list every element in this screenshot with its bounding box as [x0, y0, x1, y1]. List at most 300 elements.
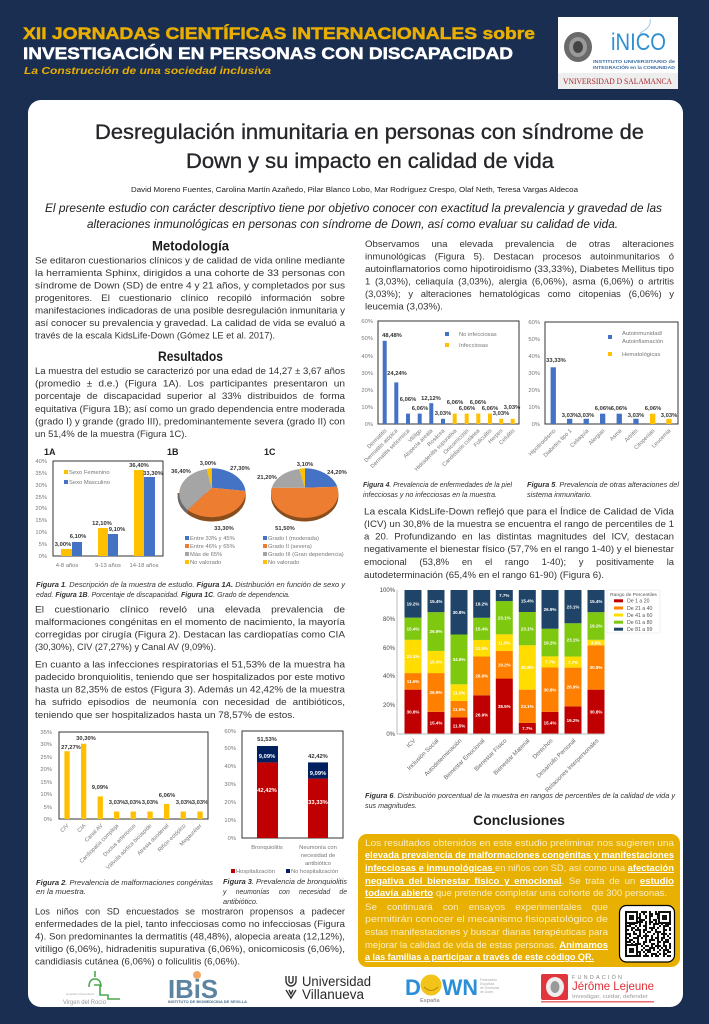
text: otras alteraciones inmunológicas: leucemia (3,03%).: [365, 302, 443, 312]
chart 1A: sexo y edad: Sexo Masculino: [69, 480, 110, 486]
chart figura 2: malformaciones: Ductus arteriosus: [102, 823, 138, 858]
chart figura 6: percentiles calidad de vida: ICV: [406, 738, 417, 749]
logo: IBiS: [168, 971, 248, 1004]
chart figura 3: bronquiolitis y neumonías: necesidad de: [301, 853, 335, 859]
chart figura 2: malformaciones: 35%: [40, 730, 52, 736]
text: piel: candidiasis cutánea (6,06%) o foliculitis (6,06%).: [35, 956, 240, 966]
chart figura 6: percentiles calidad de vida: 7.7%: [499, 593, 509, 598]
chart figura 4: piel: Dermatitis: [366, 428, 389, 450]
logo: DOWN España: WN: [442, 975, 478, 1000]
chart 1A: sexo y edad: 14-18 años: [129, 563, 159, 569]
chart figura 6: percentiles calidad de vida: Desarrollo Personal: [536, 738, 577, 780]
text: metodología: través de la escala KidsLife-Down (Gómez LE et al. 2017).: [35, 330, 275, 340]
chart figura 6: percentiles calidad de vida: Bienestar Físico: [474, 738, 509, 773]
chart 1A: sexo y edad: Sexo Femenino: [69, 470, 110, 476]
text: otras alteraciones inmunológicas: autoinflamatorios como hipotiroidismo (33,33%), Diabetes Mellitus tipo: [365, 264, 674, 274]
chart figura 6: percentiles calidad de vida: 11.5%: [453, 690, 465, 695]
chart figura 5: inmunitario: 0%: [532, 422, 540, 428]
legend figura 6: De 81 a 99: [627, 627, 652, 633]
text: metodología: manifestaciones indicadoras de una posible desregulación inmunitaria y: [35, 306, 345, 316]
logo: DOWN España: España: [420, 998, 441, 1004]
chart figura 6: percentiles calidad de vida: 7.7%: [545, 660, 555, 665]
caption figura 1: [36, 580, 346, 599]
legend figura 6: Rango de Percentiles: [610, 592, 657, 598]
chart figura 4: piel: Infecciosas: [459, 343, 488, 349]
chart figura 2: malformaciones: [40, 730, 208, 871]
logo: DOWN España: Española: [480, 982, 494, 986]
chart figura 2: malformaciones: 3,03%: [192, 800, 208, 806]
chart 1C: pie dependencia: Grado III (Gran dependencia): [268, 552, 344, 558]
text: metodología: [35, 256, 346, 340]
panel: conclusiones: Los resultados obtenidos en este estudio preliminar nos sugieren una: [365, 838, 675, 848]
intro objective: [45, 201, 662, 231]
icon: QR code: [620, 906, 674, 962]
caption figura 6: sus magnitudes.: [365, 801, 417, 810]
chart 1A: sexo y edad: 40%: [35, 459, 47, 465]
chart figura 3: bronquiolitis y neumonías: antibiótico: [305, 861, 331, 867]
chart figura 5: inmunitario: 50%: [528, 337, 540, 343]
chart figura 5: inmunitario: Artritis: [624, 428, 640, 444]
logo: DOWN España: [405, 974, 500, 1004]
panel: conclusiones: estas manifestaciones y buscar dianas terapéuticas para: [365, 927, 609, 937]
chart figura 2: malformaciones: CIV: [60, 823, 71, 834]
text: metodología: Se editaron cuestionarios clínicos y de calidad de vida online mediante: [35, 256, 345, 266]
chart figura 5: inmunitario: 20%: [528, 388, 540, 394]
chart figura 4: piel: Hidradenitis supurativa: [414, 428, 459, 473]
logo: Universidad Villanueva: Universidad: [302, 974, 371, 989]
text: metodología: síndrome de Down (SD) de entre 4 y 21 años, y completados por sus: [35, 280, 345, 290]
text: otras alteraciones inmunológicas: Observamos una elevada prevalencia de otras alteraciones: [365, 239, 674, 249]
text: calidad de vida: negativamente el bienestar físico (57,7% en el rango 1-40) y el bienestar: [364, 544, 674, 554]
chart figura 6: percentiles calidad de vida: 15.4%: [430, 599, 442, 604]
chart 1A: sexo y edad: 1A: [44, 447, 56, 457]
chart 1C: pie dependencia: 1C: [264, 447, 276, 457]
text: malformaciones: [35, 604, 346, 652]
chart figura 6: percentiles calidad de vida: 100%: [380, 588, 396, 594]
text: metodología: así conocer su prevalencia y gravedad. La calidad de vida se evaluó a: [35, 318, 346, 328]
chart figura 5: inmunitario: Alergias: [588, 428, 607, 447]
chart figura 6: percentiles calidad de vida: 26.9%: [544, 607, 556, 612]
intro objective: alteraciones inmunológicas en personas con síndrome de Down, así como evaluar su calidad de vida.: [87, 217, 618, 231]
text: infecciones respiratorias: padecido bronquiolitis, teniendo que ser hospitalizados por este motivo: [35, 672, 345, 682]
chart figura 4: piel: 24,24%: [387, 371, 407, 377]
chart figura 6: percentiles calidad de vida: 38.5%: [498, 704, 511, 709]
caption figura 1: edad. Figura 1B. Porcentaje de discapacidad. Figura 1C. Grado de dependencia.: [36, 590, 290, 599]
logo: DOWN España: D: [405, 975, 421, 1000]
chart figura 5: inmunitario: Leucemia: [651, 428, 673, 450]
chart figura 6: percentiles calidad de vida: 40%: [383, 674, 396, 680]
chart figura 6: percentiles calidad de vida: 34.6%: [453, 657, 465, 662]
chart figura 3: bronquiolitis y neumonías: Hospitalización: [236, 869, 275, 875]
text: infecciones respiratorias: ha sufrido episodios de neumonía con necesidad de antibióticos,: [35, 697, 345, 707]
chart 1A: sexo y edad: 33,30%: [143, 471, 163, 477]
logo: INICO Universidad de Salamanca: INTEGRACIÓN en la COMUNIDAD: [593, 65, 675, 70]
chart 1B: pie discapacidad: 33,30%: [214, 526, 234, 532]
chart figura 6: percentiles calidad de vida: 26.9%: [475, 674, 488, 679]
chart 1B: pie discapacidad: Entre 33% y 45%: [190, 536, 235, 542]
chart figura 2: malformaciones: 6,06%: [159, 793, 175, 799]
chart figura 6: percentiles calidad de vida: 20%: [383, 703, 396, 709]
caption figura 3: [222, 877, 347, 906]
chart figura 2: malformaciones: Megauréter: [179, 823, 204, 848]
chart figura 6: percentiles calidad de vida: 7.7%: [522, 726, 532, 731]
text: resultados: un 51,4% de la muestra (Figura 1C).: [35, 429, 187, 439]
chart figura 4: piel: 6,06%: [447, 400, 463, 406]
text: resultados: [35, 366, 346, 439]
panel: conclusiones: [358, 834, 680, 967]
chart figura 5: inmunitario: 3,03%: [562, 413, 578, 419]
chart figura 6: percentiles calidad de vida: 15.4%: [407, 626, 419, 632]
heading: Resultados: Resultados: [158, 349, 223, 364]
chart figura 3: bronquiolitis y neumonías: 20%: [224, 800, 236, 806]
chart 1A: sexo y edad: 25%: [35, 495, 47, 501]
chart figura 4: piel: [361, 319, 520, 473]
chart 1A: sexo y edad: 12,10%: [92, 521, 112, 527]
chart figura 5: inmunitario: 6,06%: [611, 406, 627, 412]
chart figura 5: inmunitario: Hematológicas: [622, 352, 660, 358]
logo: INICO Universidad de Salamanca: VNIVERSIDAD D SALAMANCA: [563, 77, 672, 86]
text: resultados: equitativa (Figura 1B); así como un grado dependencia entre moderada: [35, 404, 346, 414]
chart figura 6: percentiles calidad de vida: 11.5%: [453, 723, 465, 728]
text: calidad de vida: La escala KidsLife-Down reflejó que para el Índice de Calidad de Vida: [364, 506, 675, 516]
chart figura 6: percentiles calidad de vida: 26.9%: [430, 690, 442, 695]
text: malformaciones: corregidas por cirugía (Figura 2). Destacan las cardiopatías como CIA: [35, 630, 346, 640]
caption figura 2: [36, 878, 213, 896]
logo: INICO Universidad de Salamanca: [558, 17, 678, 89]
chart figura 5: inmunitario: Citopenias: [633, 428, 657, 451]
text: metodología: la herramienta Sphinx, dirigidos a una cohorte de 33 personas con: [35, 268, 345, 278]
chart figura 5: inmunitario: 10%: [528, 405, 540, 411]
chart figura 4: piel: 6,06%: [400, 397, 416, 403]
chart figura 4: piel: Onicomicosis: [443, 428, 471, 456]
text: infecciones respiratorias: teniendo que ser hospitalizados hasta un 78,57% de estos.: [35, 710, 295, 720]
chart figura 4: piel: 48,48%: [382, 333, 402, 339]
caption figura 2: Figura 2. Prevalencia de malformaciones congénitas: [36, 878, 213, 887]
chart figura 3: bronquiolitis y neumonías: 42,42%: [257, 788, 277, 794]
chart figura 6: percentiles calidad de vida: [380, 588, 660, 794]
chart 1C: pie dependencia: Grado I (moderada): [268, 536, 319, 542]
chart figura 5: inmunitario: 3,03%: [628, 413, 644, 419]
text: infecciones respiratorias: [35, 660, 346, 720]
logo: IBiS: IBiS: [168, 974, 218, 1004]
logo: Universidad Villanueva: [286, 974, 371, 1002]
chart figura 4: piel: Dermatitis atópica: [364, 428, 400, 464]
text: resultados: (grado I) y grande (grado III), predominantemente severa (grado II) con: [35, 416, 345, 426]
caption figura 4: infecciosas y no infecciosas en la muestra.: [363, 490, 497, 499]
chart figura 3: bronquiolitis y neumonías: 10%: [224, 818, 236, 824]
chart figura 6: percentiles calidad de vida: 23.1%: [521, 626, 534, 631]
chart figura 3: bronquiolitis y neumonías: 51,53%: [257, 737, 277, 743]
chart figura 6: percentiles calidad de vida: 15.4%: [475, 627, 488, 632]
chart figura 2: malformaciones: Válvula aórtica bicúspide: [105, 823, 153, 871]
chart figura 6: percentiles calidad de vida: 19.2%: [544, 640, 556, 645]
text: calidad de vida: emocional (53,8% en el rango 1-40); y positivamente la: [364, 557, 675, 567]
caption figura 1: Figura 1. Descripción de la muestra de estudio. Figura 1A. Distribución en función de sexo y: [36, 580, 346, 589]
chart figura 2: malformaciones: 5%: [44, 805, 52, 811]
chart 1A: sexo y edad: 4-8 años: [56, 563, 78, 569]
text: piel: [35, 906, 346, 966]
chart figura 4: piel: 6,06%: [412, 406, 428, 412]
chart figura 6: percentiles calidad de vida: Bienestar Emocional: [443, 738, 486, 781]
text: otras alteraciones inmunológicas: (3,03%); y alteraciones hematológicas como citopenias (6,06%) y: [365, 289, 674, 299]
chart figura 4: piel: 3,03%: [504, 405, 520, 411]
text: infecciones respiratorias: En cuanto a las infecciones respiratorias el 51,53% de la muestra ha: [35, 660, 346, 670]
chart figura 5: inmunitario: Autoinflamación: [622, 339, 663, 345]
chart figura 2: malformaciones: 0%: [44, 817, 52, 823]
chart figura 5: inmunitario: 3,03%: [661, 413, 677, 419]
chart figura 2: malformaciones: 3,03%: [125, 800, 141, 806]
chart 1A: sexo y edad: 5%: [39, 542, 47, 548]
chart figura 4: piel: Celulitis: [498, 428, 517, 446]
text: piel: 4). Son predominantes la dermatitis (48,48%), alopecia areata (12,12%),: [35, 932, 345, 942]
chart figura 2: malformaciones: 20%: [40, 767, 52, 773]
chart figura 6: percentiles calidad de vida: 23.1%: [407, 654, 419, 659]
caption figura 3: Figura 3. Prevalencia de bronquiolitis: [223, 877, 347, 886]
logo: Fundación Jérôme Lejeune: Jérôme Lejeune: [572, 979, 654, 993]
chart figura 6: percentiles calidad de vida: 80%: [383, 617, 396, 623]
caption figura 6: Figura 6. Distribución porcentual de la muestra en rangos de percentiles de la calidad de vida y: [365, 791, 676, 800]
chart 1B: pie discapacidad: Entre 46% y 65%: [190, 544, 235, 550]
text: calidad de vida: a 20. Profundizando en las distintas magnitudes del ICV, destacan: [364, 532, 674, 542]
caption figura 5: sistema inmunitario.: [527, 490, 592, 499]
logo: Universidad Villanueva: Villanueva: [302, 987, 364, 1002]
chart 1C: pie dependencia: Grado II (severa): [268, 544, 312, 550]
chart figura 6: percentiles calidad de vida: 11.5%: [498, 640, 511, 645]
chart figura 6: percentiles calidad de vida: 30.8%: [521, 665, 534, 670]
chart figura 3: bronquiolitis y neumonías: No hospitalización: [291, 869, 338, 875]
panel: conclusiones: mejorar la calidad de vida de estas personas. Animamos: [365, 940, 608, 950]
chart figura 6: percentiles calidad de vida: 15.4%: [544, 721, 556, 726]
text: resultados: (promedio ± d.e.) (Figura 1A). Los participantes presentaron un: [35, 378, 345, 388]
chart figura 4: piel: 12,12%: [421, 396, 441, 402]
logo: Fundación Jérôme Lejeune: [541, 974, 654, 1002]
title: [95, 120, 644, 173]
text: piel: vitíligo (6,06%), hidradenitis supurativa (6,06%), onicomicosis (6,06%),: [35, 944, 345, 954]
chart figura 4: piel: Candidiasis cutánea: [442, 428, 482, 468]
logo: Virgen del Rocío: Virgen del Rocío: [63, 1000, 107, 1006]
chart figura 2: malformaciones: Atresia duodenal: [136, 823, 170, 857]
chart figura 3: bronquiolitis y neumonías: Neumonía con: [299, 845, 337, 851]
legend figura 6: De 1 a 20: [627, 599, 650, 605]
header: conference title: INVESTIGACIÓN EN PERSONAS CON DISCAPACIDAD: [23, 44, 513, 63]
chart figura 6: percentiles calidad de vida: 11.5%: [407, 679, 419, 684]
chart figura 6: percentiles calidad de vida: 30.8%: [453, 610, 465, 615]
chart figura 4: piel: Vitíligo: [407, 428, 423, 444]
chart figura 3: bronquiolitis y neumonías: 9,09%: [259, 754, 275, 760]
intro objective: El presente estudio con carácter descriptivo tiene por objetivo conocer con exactitud la prevalencia y gravedad de las: [45, 201, 662, 215]
chart 1A: sexo y edad: 20%: [35, 506, 47, 512]
text: metodología: progenitores. El cuestionario clínico recopiló información sobre: [35, 293, 345, 303]
caption figura 2: en la muestra.: [36, 887, 86, 896]
text: malformaciones: malformaciones congénitas en el momento de nacimiento, la mayoría: [35, 617, 346, 627]
chart figura 5: inmunitario: Diabetes tipo 1: [543, 428, 573, 459]
chart figura 2: malformaciones: 10%: [40, 792, 52, 798]
chart figura 4: piel: 6,06%: [459, 406, 475, 412]
chart figura 6: percentiles calidad de vida: 23.1%: [498, 615, 511, 620]
chart figura 6: percentiles calidad de vida: 15.4%: [521, 599, 534, 604]
panel: conclusiones: infecciosas e inmunológicas en niños con SD, así como una afectación: [365, 863, 674, 873]
legend figura 6: De 61 a 80: [627, 620, 652, 626]
chart figura 6: percentiles calidad de vida: 19.2%: [567, 718, 579, 723]
chart figura 6: percentiles calidad de vida: 23.1%: [521, 704, 534, 709]
title: Desregulación inmunitaria en personas con síndrome de: [95, 120, 644, 144]
chart figura 5: inmunitario: Autoinmunidad/: [622, 331, 663, 337]
chart figura 6: percentiles calidad de vida: 23.1%: [567, 604, 579, 609]
chart figura 3: bronquiolitis y neumonías: 42,42%: [308, 754, 328, 760]
logo: Fundación Jérôme Lejeune: Investigar, cuidar, defender: [572, 994, 648, 1000]
logo: DOWN España: Federación: [480, 978, 497, 982]
chart figura 6: percentiles calidad de vida: 11.5%: [453, 707, 465, 712]
chart figura 5: inmunitario: 30%: [528, 371, 540, 377]
header: conference title: [23, 24, 535, 77]
chart figura 2: malformaciones: 15%: [40, 780, 52, 786]
chart figura 3: bronquiolitis y neumonías: Bronquiolitis: [251, 845, 283, 851]
chart figura 6: percentiles calidad de vida: 26.9%: [430, 629, 442, 634]
chart 1C: pie dependencia: 21,20%: [257, 475, 277, 481]
chart figura 6: percentiles calidad de vida: 15.4%: [430, 720, 442, 726]
chart figura 6: percentiles calidad de vida: Derechos: [532, 738, 554, 761]
chart figura 6: percentiles calidad de vida: 26.9%: [475, 712, 488, 717]
panel: conclusiones: negativa del bienestar físico y emocional . Se trata de un estudio: [365, 876, 674, 886]
caption figura 6: [365, 791, 676, 810]
chart figura 5: inmunitario: 6,06%: [595, 406, 611, 412]
text: piel: enfermedades de la piel, tanto infecciosas como no infecciosas (Figura: [35, 919, 346, 929]
caption figura 5: Figura 5. Prevalencia de otras alteraciones del: [527, 480, 679, 489]
logo: Fundación Jérôme Lejeune: FUNDACIÓN: [572, 974, 622, 981]
chart 1A: sexo y edad: 9,10%: [109, 527, 125, 533]
logo: IBiS: INSTITUTO DE BIOMEDICINA DE SEVILLA: [168, 1000, 248, 1004]
chart figura 3: bronquiolitis y neumonías: 40%: [224, 764, 236, 770]
chart figura 3: bronquiolitis y neumonías: 30%: [224, 782, 236, 788]
chart figura 3: bronquiolitis y neumonías: 60%: [224, 729, 236, 735]
chart 1C: pie dependencia: 51,50%: [275, 526, 295, 532]
heading: Conclusiones: Conclusiones: [473, 812, 565, 828]
chart figura 6: percentiles calidad de vida: 60%: [383, 646, 396, 652]
chart 1A: sexo y edad: 0%: [39, 554, 47, 560]
chart figura 6: percentiles calidad de vida: Relaciones Interpersonales: [545, 738, 600, 794]
caption figura 3: antibiótico.: [223, 897, 258, 906]
chart figura 6: percentiles calidad de vida: 19.2%: [407, 602, 419, 606]
chart figura 5: inmunitario: Celiaquía: [569, 428, 591, 449]
text: piel: Los niños con SD encuestados se mostraron propensos a padecer: [35, 906, 345, 916]
chart figura 4: piel: No infecciosas: [459, 332, 497, 338]
chart figura 2: malformaciones: 27,27%: [61, 745, 81, 751]
caption figura 3: y neumonías con necesidad de: [222, 887, 347, 896]
chart figura 5: inmunitario: Hipotiroidismo: [528, 428, 557, 457]
chart figura 4: piel: 3,03%: [435, 411, 451, 417]
chart figura 2: malformaciones: 30%: [40, 742, 52, 748]
chart 1A: sexo y edad: 10%: [35, 530, 47, 536]
chart 1C: pie dependencia: 3,10%: [297, 462, 313, 468]
chart figura 3: bronquiolitis y neumonías: 33,33%: [308, 800, 328, 806]
text: malformaciones: El cuestionario clínico reveló una elevada prevalencia de: [35, 604, 345, 614]
chart figura 5: inmunitario: 6,06%: [645, 406, 661, 412]
chart figura 6: percentiles calidad de vida: 26.9%: [567, 685, 579, 690]
chart figura 3: bronquiolitis y neumonías: [224, 729, 343, 875]
logo: Virgen del Rocío: Hospital Universitario: [66, 992, 95, 996]
chart figura 2: malformaciones: 3,03%: [109, 800, 125, 806]
chart figura 4: piel: Herpes: [487, 428, 505, 445]
chart 1B: pie discapacidad: 36,40%: [171, 469, 191, 475]
chart 1A: sexo y edad: 30%: [35, 483, 47, 489]
chart figura 4: piel: 60%: [361, 319, 373, 325]
chart figura 6: percentiles calidad de vida: 15.4%: [590, 599, 602, 604]
chart figura 4: piel: 0%: [365, 422, 373, 428]
chart figura 4: piel: 3,03%: [493, 411, 509, 417]
chart figura 6: percentiles calidad de vida: 11.5%: [475, 646, 488, 651]
chart figura 6: percentiles calidad de vida: Bienestar Material: [493, 738, 531, 777]
caption figura 4: Figura 4. Prevalencia de enfermedades de la piel: [363, 480, 512, 489]
chart figura 4: piel: 50%: [361, 336, 373, 342]
text: infecciones respiratorias: hasta un 82,35% de estos (Figura 3). Además un 42,42% de la muestra: [35, 684, 346, 694]
chart figura 2: malformaciones: CIA: [77, 823, 88, 834]
chart 1B: pie discapacidad: 3,00%: [200, 461, 216, 467]
logo: DOWN España: de Down: [480, 990, 493, 994]
chart figura 2: malformaciones: 25%: [40, 755, 52, 761]
chart 1A: sexo y edad: 9-13 años: [95, 563, 121, 569]
chart figura 6: percentiles calidad de vida: Inclusión Social: [407, 738, 440, 772]
panel: conclusiones: a las familias a participar a través de este código QR.: [365, 952, 594, 962]
chart figura 6: percentiles calidad de vida: 15.4%: [430, 660, 442, 665]
chart figura 2: malformaciones: 3,03%: [142, 800, 158, 806]
header: conference title: La Construcción de una sociedad inclusiva: [24, 66, 272, 77]
caption figura 5: [527, 480, 679, 499]
chart figura 2: malformaciones: 3,03%: [176, 800, 192, 806]
chart 1A: sexo y edad: 3,00%: [55, 542, 71, 548]
chart figura 4: piel: 40%: [361, 354, 373, 360]
chart figura 6: percentiles calidad de vida: 3.8%: [591, 640, 601, 645]
chart figura 4: piel: 10%: [361, 405, 373, 411]
chart figura 6: percentiles calidad de vida: 30.8%: [544, 687, 556, 692]
chart figura 2: malformaciones: Riñón ectópico: [157, 823, 187, 854]
chart figura 6: percentiles calidad de vida: 19.2%: [498, 662, 511, 667]
header: conference title: XII JORNADAS CIENTÍFICAS INTERNACIONALES sobre: [23, 24, 535, 43]
chart 1B: pie discapacidad: 27,30%: [230, 466, 250, 472]
text: malformaciones: (30,30%), CIV (27,27%) y Canal AV (9,09%).: [35, 642, 216, 652]
chart 1B: pie discapacidad: No valorado: [190, 560, 221, 566]
heading: Metodología: Metodología: [152, 238, 229, 254]
text: resultados: La muestra del estudio se caracterizó por una edad de 14,27 ± 3,67 años: [35, 366, 345, 376]
logo: INICO Universidad de Salamanca: INSTITUTO UNIVERSITARIO de: [593, 59, 676, 64]
text: calidad de vida: autodeterminación (65,4% en el rango 61-90) (Figura 6).: [364, 570, 604, 580]
chart figura 6: percentiles calidad de vida: 19.2%: [475, 602, 488, 607]
logo: DOWN España: de Síndrome: [480, 986, 500, 990]
legend figura 6: [607, 590, 660, 633]
chart figura 4: piel: Alopecia areata: [403, 428, 435, 460]
chart figura 2: malformaciones: Cardiopatía compleja: [79, 823, 121, 865]
authors: David Moreno Fuentes, Carolina Martín Azañedo, Pilar Blanco Lobo, Mar Rodríguez Crespo, Olaf Neth, Teresa Vargas Aldecoa: [131, 185, 579, 194]
chart figura 2: malformaciones: Canal AV: [84, 823, 105, 844]
panel: conclusiones: permitirán conocer el mecanismo fisiopatológico de: [365, 914, 608, 924]
chart figura 4: piel: 6,06%: [470, 400, 486, 406]
legend figura 6: De 41 a 60: [627, 613, 652, 619]
chart figura 5: inmunitario: 33,33%: [546, 358, 566, 364]
chart 1A: sexo y edad: 36,40%: [129, 463, 149, 469]
chart figura 5: inmunitario: 3,03%: [578, 413, 594, 419]
logo: INICO Universidad de Salamanca: iNICO: [611, 29, 666, 56]
chart 1B: pie discapacidad: Más de 65%: [190, 552, 222, 558]
chart 1B: pie discapacidad: 1B: [167, 447, 179, 457]
chart figura 6: percentiles calidad de vida: 19.2%: [590, 624, 602, 629]
chart 1A: sexo y edad: 6,10%: [70, 534, 86, 540]
chart figura 4: piel: 30%: [361, 371, 373, 377]
panel: conclusiones: elevada prevalencia de malformaciones congénitas y manifestaciones: [365, 850, 674, 860]
chart 1C: pie dependencia: [257, 447, 347, 566]
chart figura 3: bronquiolitis y neumonías: 0%: [228, 836, 236, 842]
chart figura 5: inmunitario: Asma: [609, 428, 624, 443]
chart figura 6: percentiles calidad de vida: 30.8%: [590, 710, 602, 714]
chart 1A: sexo y edad: 15%: [35, 518, 47, 524]
